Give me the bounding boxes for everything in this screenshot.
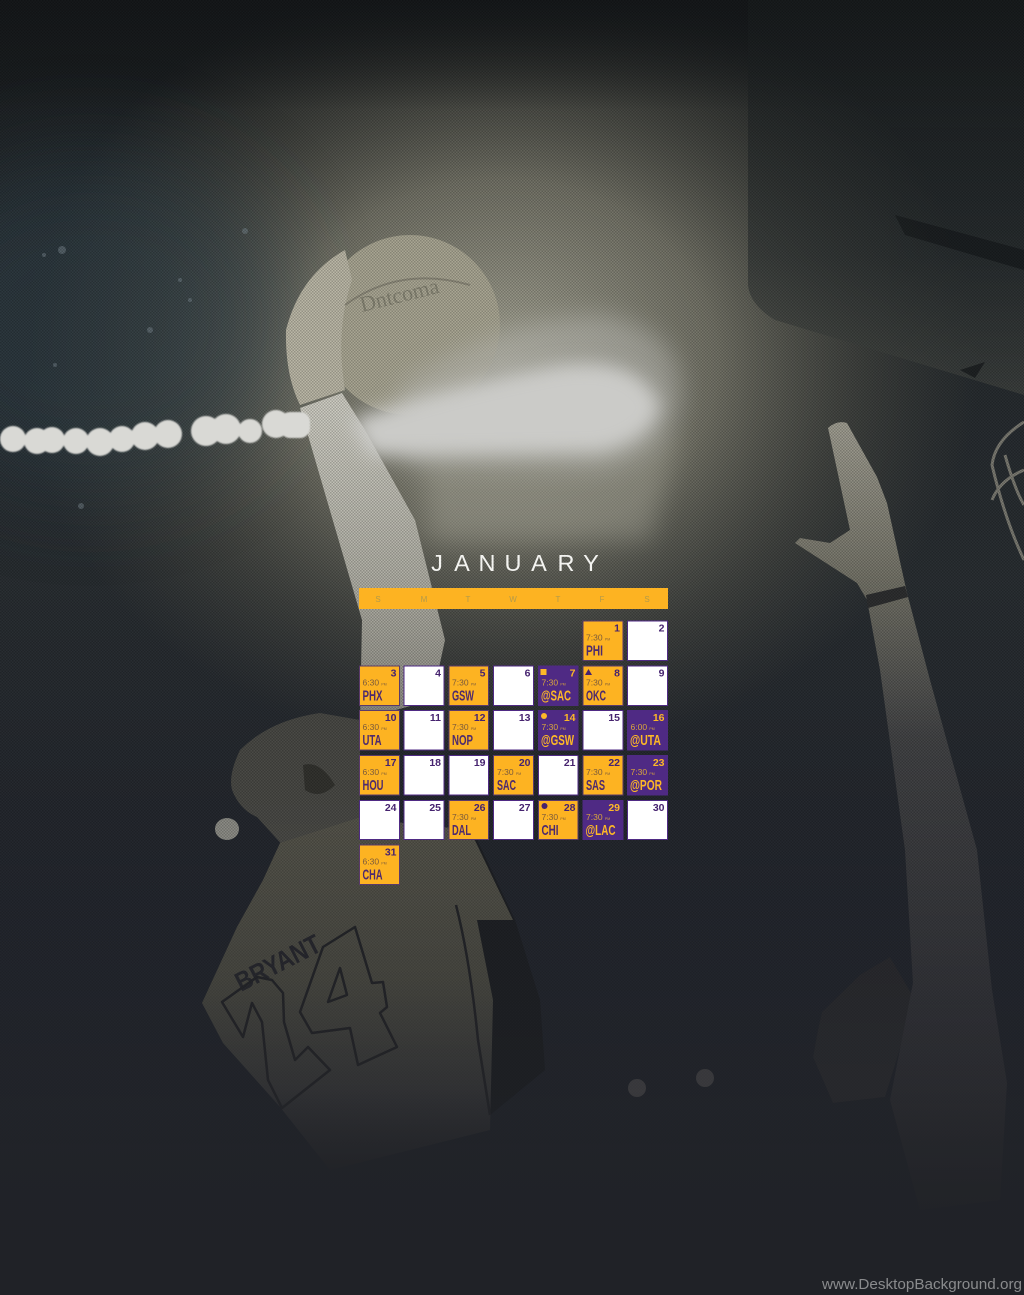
jersey name: BRYANT — [230, 929, 326, 997]
rim and net — [992, 422, 1024, 560]
day 23: 7:30 PM — [630, 767, 655, 777]
day 26: 26 — [474, 802, 486, 814]
day 29 — [582, 800, 624, 840]
day 8: 7:30 PM — [586, 678, 610, 688]
day 31: 6:30 PM — [362, 856, 387, 866]
defender arm — [795, 422, 1007, 1210]
day 22 — [583, 756, 623, 795]
weekday header: S — [375, 595, 381, 604]
day 9 — [628, 666, 668, 706]
day 15 — [583, 710, 623, 750]
day 18: 18 — [429, 757, 441, 769]
day 17 — [360, 756, 400, 795]
day 19 — [449, 756, 488, 795]
day 29: @LAC — [586, 822, 616, 839]
day 24 — [360, 800, 400, 840]
day 16 — [627, 710, 668, 750]
day 18 — [404, 756, 444, 795]
day 3: 3 — [391, 668, 397, 680]
weekday header: M — [421, 595, 428, 604]
day 22: 7:30 PM — [586, 767, 610, 777]
ball lettering: Dntcoma — [357, 273, 442, 317]
wristband — [866, 586, 908, 608]
day 15: 15 — [608, 712, 620, 724]
day 28: 28 — [564, 802, 576, 814]
day 12 — [449, 710, 488, 750]
day 17: HOU — [362, 777, 384, 794]
bokeh: right pair — [628, 1069, 714, 1097]
day 20 — [494, 756, 534, 795]
day 10: UTA — [362, 732, 382, 749]
day 23 — [627, 755, 668, 796]
day 12: NOP — [452, 732, 473, 749]
light flare — [350, 315, 681, 540]
day 11 — [404, 710, 444, 750]
day 17: 17 — [385, 757, 397, 769]
day 23: 23 — [653, 757, 665, 769]
Kobe ear — [303, 764, 335, 794]
Kobe head — [231, 713, 360, 848]
day 31: CHA — [362, 866, 383, 884]
defender head — [813, 957, 915, 1103]
day 6: 6 — [525, 668, 531, 680]
weekday header: T — [466, 595, 471, 604]
day 28: 7:30 PM — [542, 812, 566, 822]
day 19: 19 — [474, 757, 486, 769]
day 5: 5 — [480, 668, 486, 680]
day 24: 24 — [385, 802, 397, 814]
day 31 — [360, 845, 400, 884]
day 12: 7:30 PM — [452, 722, 476, 732]
day 16: @UTA — [630, 732, 661, 749]
ball and hand — [286, 235, 500, 415]
day 1 — [583, 621, 623, 660]
day 26: 7:30 PM — [452, 812, 476, 822]
day 12: 12 — [474, 712, 486, 724]
day 8 — [583, 666, 623, 706]
day 10: 6:30 PM — [362, 722, 387, 732]
watermark: www.DesktopBackground.org — [821, 1276, 1022, 1293]
day 1: PHI — [586, 642, 603, 660]
day 3: 6:30 PM — [362, 678, 387, 688]
bottom fade — [0, 1090, 1024, 1295]
backboard — [748, 0, 1024, 395]
day 5: 7:30 PM — [452, 678, 476, 688]
day 26: DAL — [452, 822, 471, 839]
day 29: 7:30 PM — [586, 812, 610, 822]
day 2 — [628, 621, 668, 660]
day 8: OKC — [586, 688, 606, 704]
weekday header — [359, 588, 668, 609]
day 25: 25 — [429, 802, 441, 814]
day 1: 7:30 PM — [586, 632, 610, 642]
calendar grid — [360, 621, 668, 884]
day 5: GSW — [452, 688, 475, 704]
day 14: @GSW — [541, 732, 575, 749]
day 28: CHI — [542, 822, 558, 839]
day 4 — [404, 666, 444, 706]
day 14 — [538, 710, 578, 750]
bokeh: left — [215, 818, 239, 840]
day 22: SAS — [586, 777, 605, 794]
weekday header: T — [556, 595, 561, 604]
day 8: 8 — [614, 668, 620, 680]
day 21 — [538, 756, 578, 795]
day 21: 21 — [564, 757, 576, 769]
halftone overlay — [0, 51, 1024, 958]
day 29: 29 — [608, 802, 620, 814]
day 3 — [360, 666, 400, 706]
day 28 — [538, 800, 578, 840]
day 7: 7:30 PM — [542, 678, 566, 688]
day 13 — [494, 710, 534, 750]
day 20: SAC — [497, 777, 516, 794]
day 7 — [538, 666, 578, 706]
string of lights — [0, 410, 310, 456]
day 17: 6:30 PM — [362, 767, 387, 777]
day 16: 6:00 PM — [630, 722, 655, 732]
day 11: 11 — [430, 712, 441, 724]
day 27: 27 — [519, 802, 531, 814]
day 16: 16 — [653, 712, 665, 724]
day 1: 1 — [614, 622, 620, 634]
day 25 — [404, 800, 444, 840]
day 30: 30 — [653, 802, 665, 814]
day 2: 2 — [659, 622, 665, 634]
day 22: 22 — [608, 757, 620, 769]
day 26 — [449, 800, 488, 840]
day 3: PHX — [362, 688, 382, 704]
day 4: 4 — [435, 668, 441, 680]
day 5 — [449, 666, 488, 706]
day 7: @SAC — [541, 688, 571, 704]
day 30 — [628, 800, 668, 840]
day 10 — [360, 710, 400, 750]
day 20: 7:30 PM — [497, 767, 521, 777]
day 9: 9 — [659, 668, 665, 680]
weekday header: F — [600, 595, 605, 604]
weekday header: W — [509, 595, 517, 604]
month title: JANUARY — [431, 550, 599, 576]
day 14: 7:30 PM — [542, 722, 566, 732]
day 13: 13 — [519, 712, 531, 724]
day 7: 7 — [570, 668, 576, 680]
day 31: 31 — [385, 846, 397, 858]
day 14: 14 — [564, 712, 576, 724]
day 27 — [494, 800, 534, 840]
day 6 — [494, 666, 534, 706]
Kobe jersey — [202, 818, 513, 1170]
day 10: 10 — [385, 712, 397, 724]
arena lights speckle — [42, 228, 248, 509]
weekday header: S — [644, 595, 650, 604]
jersey number — [222, 927, 397, 1108]
shooter arm — [300, 393, 445, 720]
day 20: 20 — [519, 757, 531, 769]
day 23: @POR — [630, 777, 662, 794]
Kobe shoulder shadow arm — [430, 825, 545, 1115]
